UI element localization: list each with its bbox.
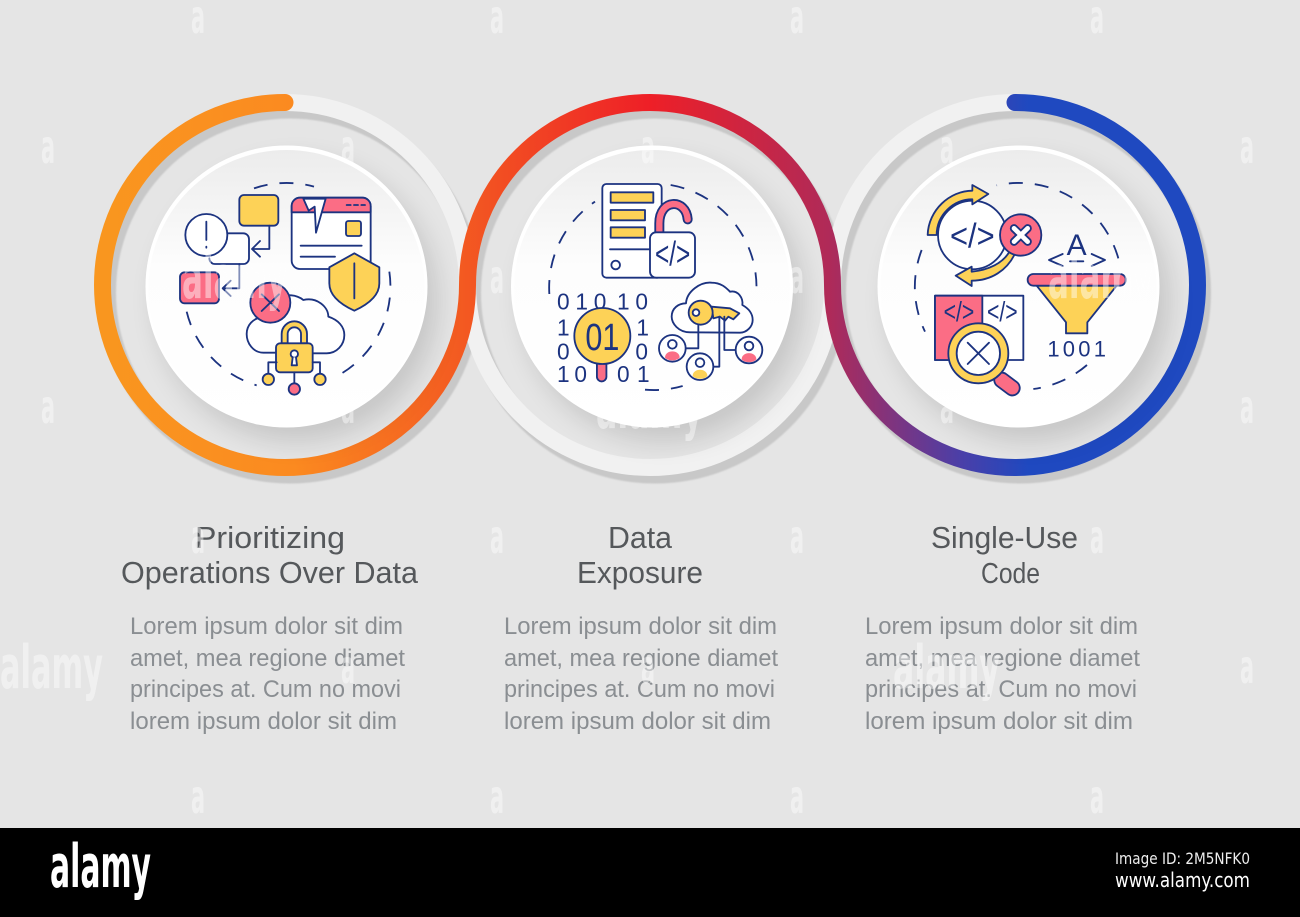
panel: single-use code [865, 146, 1170, 735]
heading 3: Code [981, 558, 1040, 590]
heading 1: Operations Over Data [121, 555, 419, 590]
text block 2: amet, mea regione diamet [504, 645, 778, 672]
watermark pattern: a [790, 250, 804, 304]
text block 3: amet, mea regione diamet [865, 645, 1140, 672]
heading 3 [931, 520, 1078, 590]
heading 3: Single-Use [931, 520, 1078, 555]
watermark pattern: alamy [1048, 243, 1153, 313]
watermark pattern: alamy [596, 373, 703, 443]
text block 2: Lorem ipsum dolor sit dim [504, 613, 777, 640]
watermark pattern: a [1090, 510, 1104, 564]
footer bar: alamy [50, 832, 151, 902]
binary digits: 0 [557, 289, 570, 315]
light ring segments [285, 102, 1015, 468]
watermark pattern: a [191, 510, 205, 564]
icon: server, binary code and cloud key [549, 184, 762, 390]
text block 2 [504, 613, 778, 735]
gradient ribbon connecting the three circles [102, 102, 1198, 468]
text block 1: principes at. Cum no movi [130, 676, 401, 703]
binary digits: 0 [574, 361, 587, 387]
heading 2: Data [608, 520, 673, 555]
watermark pattern: a [641, 120, 655, 174]
loop ring shadows [108, 110, 1202, 475]
binary digits: 1 [557, 361, 570, 387]
icon: server, binary code and cloud key: 01 [585, 317, 619, 359]
heading 2: Exposure [577, 555, 703, 590]
disc 1 [146, 146, 438, 442]
watermark pattern: a [940, 120, 954, 174]
icon: code loop, funnel and magnifier: </> [950, 217, 995, 255]
heading 2 [577, 520, 703, 590]
text block 3 [865, 613, 1140, 735]
text block 3: lorem ipsum dolor sit dim [865, 708, 1133, 735]
watermark pattern: a [490, 250, 504, 304]
text: a [1240, 120, 1254, 174]
watermark pattern: alamy [182, 243, 287, 313]
icon: code loop, funnel and magnifier: </> [987, 296, 1018, 327]
icon: code loop, funnel and magnifier: 1001 [1047, 337, 1106, 362]
binary digits: 0 [635, 289, 648, 315]
binary digits [557, 289, 650, 387]
text block 3: Lorem ipsum dolor sit dim [865, 613, 1138, 640]
watermark pattern: a [490, 770, 504, 824]
binary digits: 1 [557, 314, 570, 340]
watermark pattern: a [341, 120, 355, 174]
watermark pattern: a [341, 640, 355, 694]
disc 2 [511, 146, 804, 442]
binary digits: 1 [636, 314, 649, 340]
text block 3: principes at. Cum no movi [865, 676, 1137, 703]
icon: server, binary code and cloud key: </> [655, 235, 690, 273]
binary digits: 1 [617, 289, 630, 315]
text block 1 [130, 613, 405, 735]
watermark pattern: a [940, 380, 954, 434]
website: www.alamy.com [1115, 868, 1250, 892]
watermark pattern: a [1090, 770, 1104, 824]
disc 3 [878, 146, 1170, 442]
heading 1 [121, 520, 419, 590]
binary digits: 0 [617, 361, 630, 387]
text block 1: amet, mea regione diamet [130, 645, 405, 672]
watermark pattern: a [790, 770, 804, 824]
text: a [1240, 640, 1254, 694]
text: a [1240, 380, 1254, 434]
text block 2: principes at. Cum no movi [504, 676, 775, 703]
icon: code loop, funnel and magnifier: A [1067, 229, 1087, 262]
icon: dashboard, cloud lock and alerts [180, 183, 390, 395]
watermark pattern: a [191, 770, 205, 824]
text block 1: lorem ipsum dolor sit dim [130, 708, 397, 735]
watermark pattern: a [490, 510, 504, 564]
watermark pattern: a [41, 120, 55, 174]
heading 1: Prioritizing [195, 520, 345, 555]
watermark pattern: a [790, 510, 804, 564]
text block 1: Lorem ipsum dolor sit dim [130, 613, 403, 640]
image id: Image ID: 2M5NFK0 [1115, 849, 1250, 868]
icon: code loop, funnel and magnifier [915, 183, 1126, 389]
binary digits: 1 [575, 289, 588, 315]
watermark pattern: a [341, 380, 355, 434]
watermark pattern: a [41, 380, 55, 434]
watermark pattern: a [641, 640, 655, 694]
binary digits: 0 [594, 289, 606, 315]
footer bar [0, 828, 1300, 917]
icon: code loop, funnel and magnifier: </> [944, 296, 974, 327]
panel: data exposure [504, 146, 804, 735]
panel: prioritizing operations over data [121, 146, 438, 735]
watermark pattern: alamy [893, 633, 1000, 703]
text block 2: lorem ipsum dolor sit dim [504, 708, 771, 735]
binary digits: 0 [557, 338, 570, 364]
binary digits: 0 [635, 338, 648, 364]
watermark pattern: alamy [0, 633, 103, 703]
binary digits: 1 [637, 361, 650, 387]
